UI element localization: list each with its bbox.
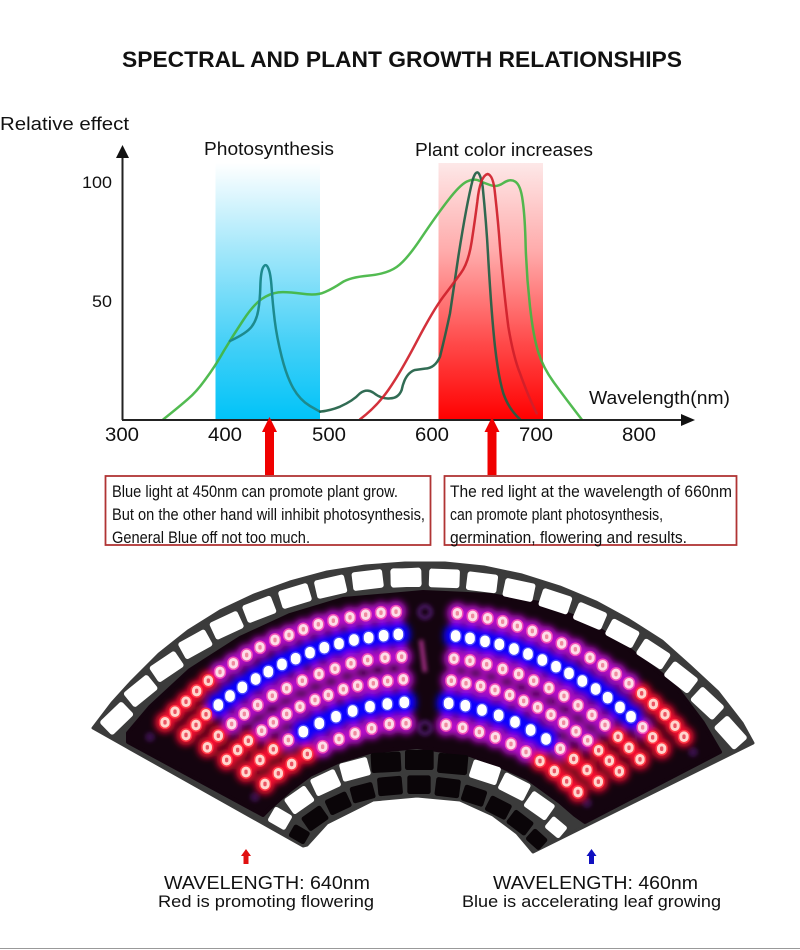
icon: small blue arrow	[586, 849, 596, 864]
x tick 600: 600	[415, 425, 449, 446]
wavelength heading: WAVELENGTH: 460nm	[493, 872, 698, 893]
bottom rule	[0, 948, 800, 949]
outer white windows: left	[99, 568, 422, 736]
LED glow	[165, 611, 406, 785]
x tick 800: 800	[622, 425, 656, 446]
x tick 400: 400	[208, 425, 242, 446]
wavelength note: Blue is accelerating leaf growing	[462, 892, 721, 911]
caption: blue wavelength	[462, 872, 721, 911]
y arrow head	[116, 145, 129, 158]
LEDs: left half	[165, 611, 406, 785]
band: blue light	[216, 163, 320, 420]
wavelength note: Red is promoting flowering	[158, 892, 374, 911]
chart: spectral relative effect	[0, 114, 730, 446]
inner arc windows	[267, 750, 568, 851]
LED bodies	[446, 613, 684, 793]
callout text line 2: But on the other hand will inhibit photosynthesis,	[112, 506, 425, 524]
fan frame	[93, 563, 753, 852]
callout box	[106, 476, 430, 545]
band: red light	[438, 163, 543, 420]
callout: red light	[444, 476, 736, 547]
board details: purple components	[147, 606, 696, 806]
x tick 700: 700	[519, 425, 553, 446]
caption: red wavelength	[158, 872, 374, 911]
LEDs: right half	[446, 613, 684, 793]
icon: small red arrow	[241, 849, 251, 864]
LED bodies	[165, 611, 406, 785]
black LED board	[128, 592, 720, 822]
curve: dark green chlorophyll red peak	[320, 172, 520, 419]
arrow: blue callout	[262, 417, 277, 475]
curve: light green overall response	[163, 180, 582, 419]
title: SPECTRAL AND PLANT GROWTH RELATIONSHIPS	[122, 47, 682, 72]
x tick 500: 500	[312, 425, 346, 446]
axis: y with arrow	[122, 152, 124, 420]
outer white windows: right	[391, 568, 748, 750]
callout text line 3: germination, flowering and results.	[450, 529, 687, 547]
wavelength heading: WAVELENGTH: 640nm	[164, 872, 370, 893]
callout box	[444, 476, 736, 545]
y tick 50: 50	[92, 292, 112, 311]
curves	[163, 172, 582, 419]
callout text line 1: The red light at the wavelength of 660nm	[450, 483, 732, 501]
LED glow	[446, 613, 684, 793]
axis: x with arrow	[122, 419, 684, 421]
x tick 300: 300	[105, 425, 139, 446]
curve: teal chlorophyll blue peak	[230, 265, 320, 412]
arrow: red callout	[484, 417, 500, 475]
band label: plant color: Plant color increases	[415, 140, 593, 160]
callout text line 3: General Blue off not too much.	[112, 529, 310, 547]
callout text line 1: Blue light at 450nm can promote plant grow.	[112, 483, 398, 501]
callout: blue light	[106, 476, 430, 547]
y tick 100: 100	[82, 173, 112, 192]
x arrow head	[681, 414, 695, 426]
callout text line 2: can promote plant photosynthesis,	[450, 506, 663, 524]
LED grow light panel	[93, 563, 753, 852]
curve: red response	[360, 174, 537, 419]
x axis title: Wavelength(nm)	[589, 388, 730, 408]
band label: photosynthesis: Photosynthesis	[204, 139, 334, 159]
y axis title: Relative effect	[0, 114, 129, 134]
